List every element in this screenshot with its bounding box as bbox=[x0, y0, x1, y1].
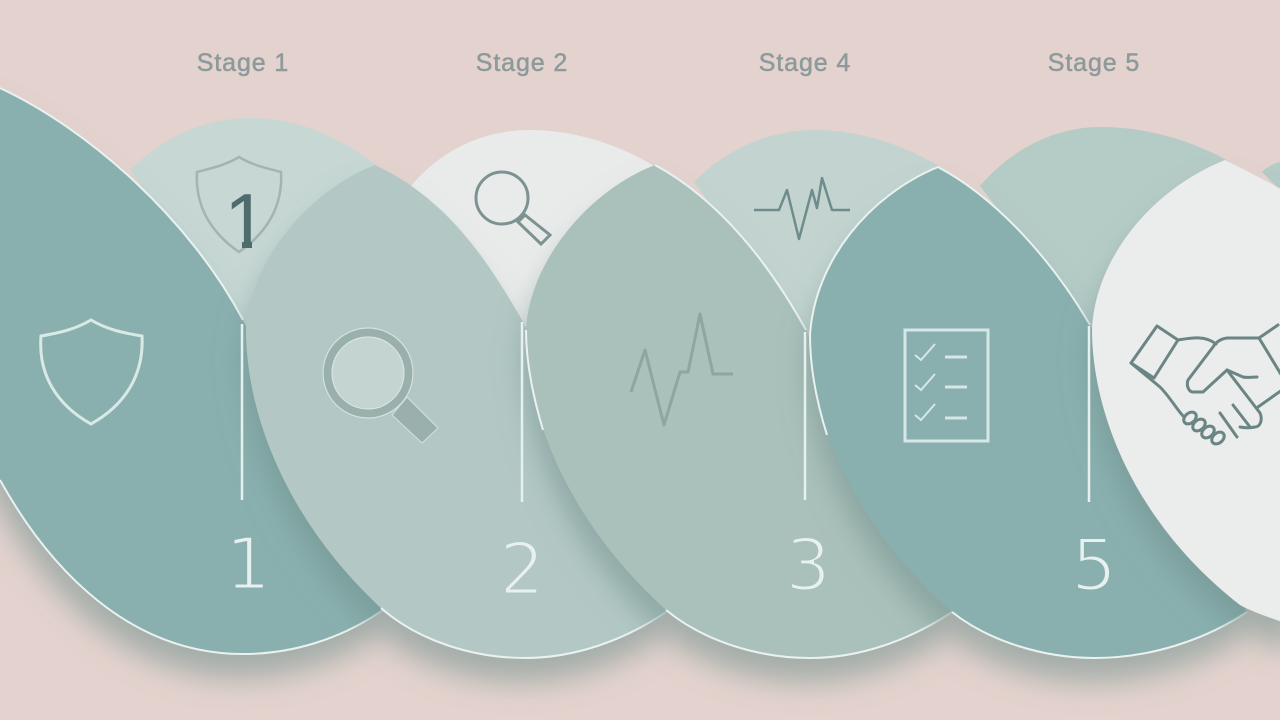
number 3: 3 bbox=[785, 523, 831, 607]
icon: shield with number 1 bbox=[197, 157, 281, 265]
icon: checklist bbox=[905, 330, 988, 441]
petal 4 bbox=[810, 167, 1247, 658]
vertical dividers bbox=[242, 322, 1089, 502]
petal 1 bbox=[0, 70, 385, 654]
label: Stage 5: Stage 5 bbox=[1048, 49, 1140, 77]
icon: small pulse bbox=[754, 178, 850, 239]
label: Stage 2: Stage 2 bbox=[476, 49, 568, 77]
stage labels bbox=[197, 49, 1140, 77]
number 5: 5 bbox=[1071, 523, 1117, 607]
back petal: stage 3 bbox=[694, 130, 942, 335]
number 2: 2 bbox=[499, 527, 545, 611]
number 1: 1 bbox=[225, 522, 271, 606]
icon: handshake bbox=[1131, 325, 1280, 446]
back petal: edge sliver bbox=[1262, 162, 1280, 190]
back petal: stage 2 bbox=[410, 130, 656, 330]
icon: shield bbox=[41, 320, 142, 424]
petal 3 bbox=[526, 165, 952, 658]
back petal: stage 1 bbox=[130, 118, 378, 330]
back petal: stage 4 bbox=[980, 127, 1230, 330]
label: Stage 1: Stage 1 bbox=[197, 49, 289, 77]
petal 2 bbox=[246, 165, 668, 658]
icon: large pulse bbox=[631, 314, 733, 425]
petal 5 bbox=[1092, 160, 1280, 628]
icon: small magnifier bbox=[476, 172, 550, 244]
label: Stage 4: Stage 4 bbox=[759, 49, 851, 77]
icon: shield with number 1: 1 bbox=[224, 177, 268, 265]
icon: large magnifier bbox=[323, 328, 438, 443]
